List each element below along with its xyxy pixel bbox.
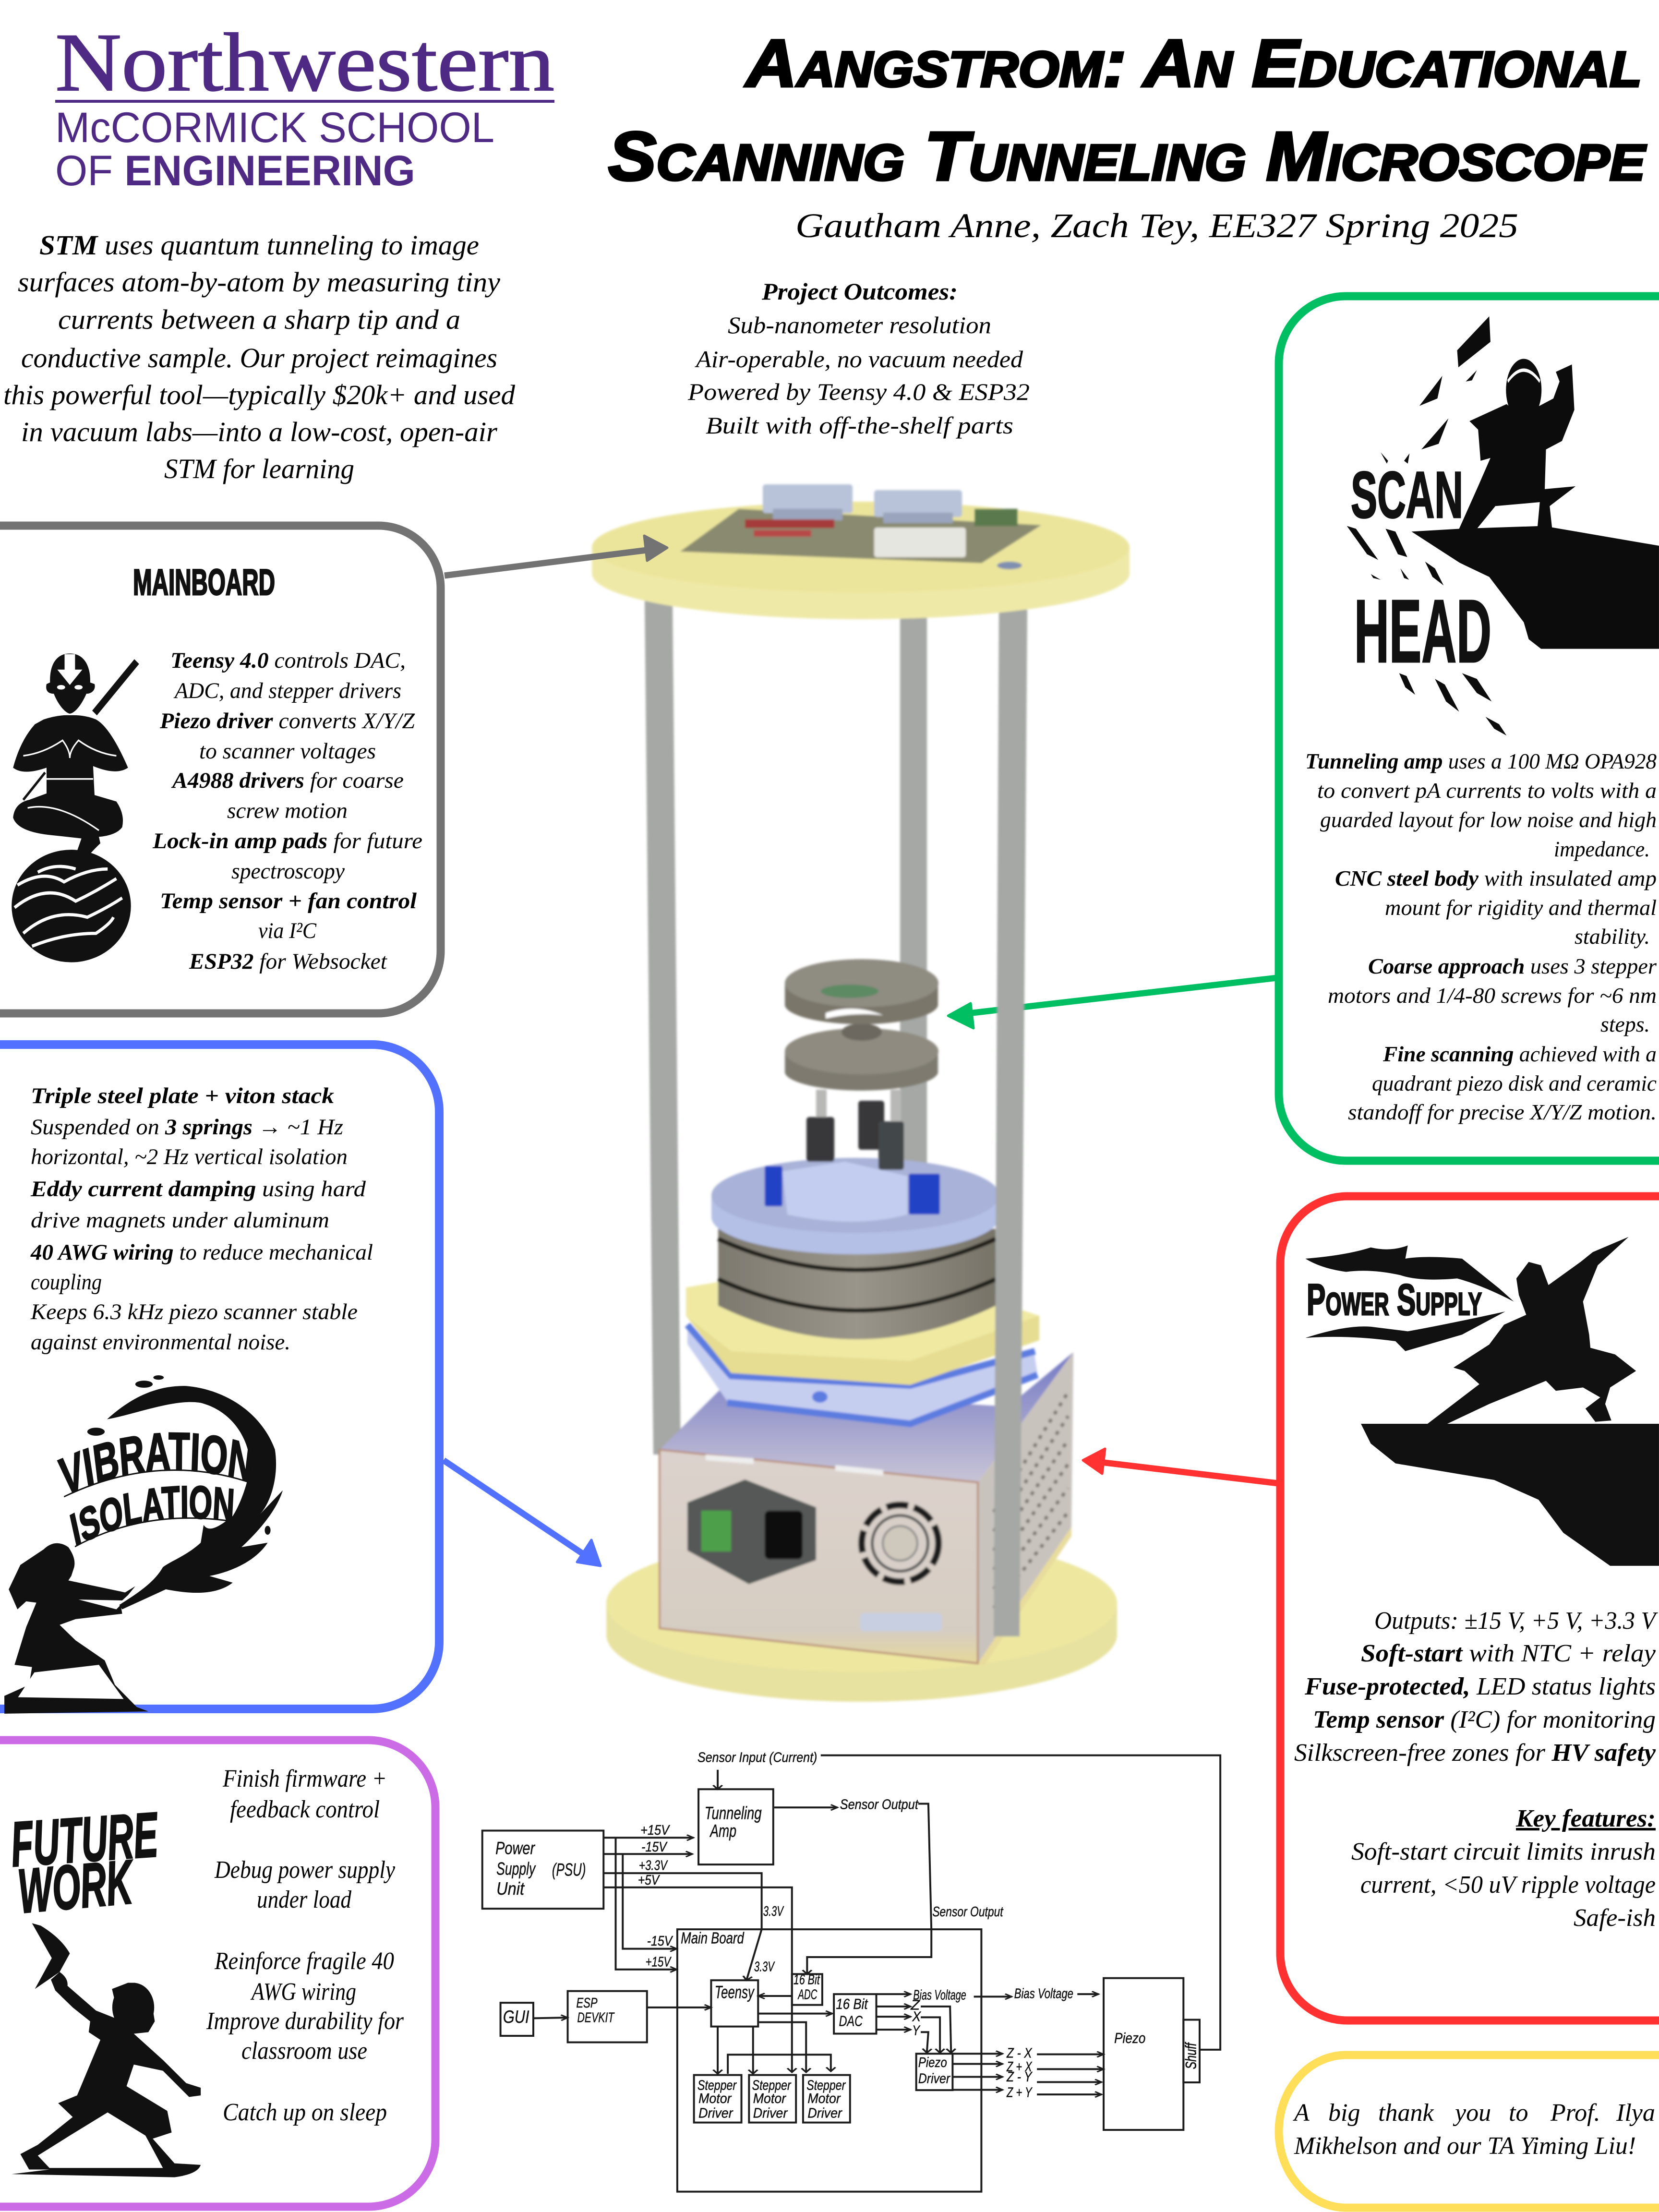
mainboard description: Lock-in amp pads for future (152, 829, 422, 854)
block diagram: Driver (753, 2105, 788, 2121)
future work list: under load (257, 1886, 352, 1913)
mainboard description: via I²C (258, 918, 317, 943)
future work list: classroom use (241, 2037, 367, 2065)
block diagram: Sensor Output (932, 1904, 1003, 1920)
block diagram: +15V (640, 1823, 670, 1838)
thank you text: Mikhelson and our TA Yiming Liu! (1294, 2132, 1636, 2160)
back rod (900, 610, 927, 1171)
vibration isolation description: against environmental noise. (31, 1330, 290, 1355)
block diagram: Z (910, 1997, 920, 2013)
title: AANGSTROM: AN EDUCATIONAL (745, 25, 1642, 101)
screws (806, 1090, 904, 1170)
lilac plate with magnets (711, 1158, 999, 1254)
block diagram: Bias Voltage (913, 1988, 966, 2003)
intro text block: conductive sample. Our project reimagines (21, 342, 497, 373)
block diagram: 16 Bit (793, 1972, 820, 1987)
block diagram: Driver (918, 2071, 951, 2086)
icon lettering: vibration isolation (57, 1432, 251, 1548)
intro text block: this powerful tool—typically $20k+ and used (3, 379, 516, 410)
scan head description: stability. (1575, 924, 1650, 949)
future work list: Improve durability for (206, 2008, 404, 2035)
block diagram: Tunneling (705, 1803, 762, 1823)
block diagram: Motor (807, 2091, 841, 2106)
heading: mainboard: MAINBOARD (133, 562, 275, 603)
icon lettering: vibration isolation: ISOLATION (70, 1485, 234, 1547)
block diagram: DAC (839, 2012, 863, 2029)
future work list: Catch up on sleep (223, 2099, 387, 2126)
scan head description: steps. (1600, 1012, 1650, 1036)
scan head description: quadrant piezo disk and ceramic (1372, 1071, 1657, 1095)
scan head description: guarded layout for low noise and high (1320, 807, 1657, 832)
icon: Toph on cliff with shards (1347, 316, 1659, 735)
logo: Northwestern McCormick School of Engineering (55, 17, 554, 194)
block diagram: Unit (496, 1878, 525, 1899)
power supply description: Temp sensor (I²C) for monitoring (1313, 1706, 1656, 1733)
power supply box (660, 1352, 1073, 1666)
block diagram: (PSU) (552, 1859, 586, 1879)
panel: mainboard (0, 526, 441, 1013)
heading: future work: FUTURE (9, 1799, 161, 1880)
panel: thank you (1279, 2055, 1659, 2208)
project outcomes text: Powered by Teensy 4.0 & ESP32 (687, 378, 1030, 405)
thank you text: Prof. (1550, 2099, 1600, 2127)
power supply description: Key features: (1515, 1805, 1656, 1832)
heading: future work: WORK (15, 1846, 137, 1926)
power supply description: current, <50 uV ripple voltage (1360, 1871, 1656, 1899)
block diagram: ADC (797, 1987, 817, 2002)
mainboard description (152, 648, 422, 974)
panel: scan head (1279, 296, 1659, 1161)
block diagram: Z + X (1006, 2059, 1032, 2075)
block diagram: Sensor Output (840, 1797, 919, 1812)
block diagram: Shuff (1182, 2042, 1200, 2069)
scan head disks (785, 959, 938, 1091)
project outcomes text: Project Outcomes: (761, 278, 958, 305)
block diagram: +3.3V (639, 1858, 668, 1873)
thank you text: A (1293, 2099, 1310, 2127)
mainboard description: Teensy 4.0 controls DAC, (170, 648, 406, 673)
vibration isolation description: Suspended on 3 springs → ~1 Hz (31, 1115, 343, 1140)
power supply description: Safe-ish (1574, 1904, 1656, 1932)
block diagram: +15V (646, 1954, 672, 1970)
future work list (206, 1765, 404, 2126)
block diagram: DEVKIT (577, 2010, 615, 2025)
future work list: Finish firmware + (222, 1765, 387, 1792)
logo: Northwestern McCormick School of Engineering: Northwestern (55, 17, 554, 108)
heading: scan head: SCAN (1351, 458, 1463, 532)
mainboard description: screw motion (227, 798, 348, 823)
power supply description (1294, 1607, 1658, 1932)
heading: scan head: HEAD (1354, 582, 1491, 681)
intro text block: surfaces atom-by-atom by measuring tiny (18, 266, 500, 298)
mainboard description: ADC, and stepper drivers (173, 678, 401, 703)
block diagram: Z - Y (1006, 2069, 1033, 2085)
arrow: power supply (1083, 1449, 1278, 1483)
scan head description: Tunneling amp uses a 100 MΩ OPA928 (1305, 749, 1657, 773)
vibration isolation description: drive magnets under aluminum (31, 1208, 329, 1233)
vibration isolation description: horizontal, ~2 Hz vertical isolation (31, 1144, 348, 1169)
block diagram: Stepper (752, 2078, 792, 2093)
logo: Northwestern McCormick School of Engineering: McCORMICK SCHOOL (55, 103, 494, 151)
intro text block: currents between a sharp tip and a (58, 304, 460, 335)
thank you text: big (1328, 2099, 1360, 2127)
block diagram: Y (912, 2023, 920, 2038)
panel: vibration isolation (0, 1040, 444, 1714)
power supply description: Soft-start with NTC + relay (1361, 1640, 1656, 1667)
logo: Northwestern McCormick School of Engineering: OF ENGINEERING (55, 146, 415, 194)
project outcomes text: Air-operable, no vacuum needed (695, 346, 1023, 373)
scan head description: to convert pA currents to volts with a (1317, 778, 1657, 803)
block diagram: Motor (698, 2091, 732, 2106)
vibration isolation description: Keeps 6.3 kHz piezo scanner stable (30, 1299, 358, 1324)
icon lettering: vibration isolation: VIBRATION (57, 1432, 251, 1494)
icon: waterbender with swirl (4, 1375, 283, 1714)
block diagram: -15V (641, 1839, 668, 1855)
intro text block (3, 229, 516, 484)
mainboard description: Temp sensor + fan control (160, 889, 417, 914)
block diagram: -15V (647, 1934, 673, 1949)
front right rod (994, 610, 1027, 1636)
power supply description: Soft-start circuit limits inrush (1351, 1838, 1656, 1865)
intro text block: STM for learning (164, 453, 354, 484)
scan head description: motors and 1/4-80 screws for ~6 nm (1328, 983, 1657, 1008)
block diagram: Piezo (1114, 2030, 1145, 2046)
heading: power supply: POWER SUPPLY (1307, 1275, 1482, 1324)
heading: scan head (1351, 458, 1491, 681)
thank you text: to (1509, 2099, 1528, 2127)
block diagram: Stepper (806, 2078, 846, 2093)
intro text block: STM uses quantum tunneling to image (39, 229, 479, 261)
authors line: Gautham Anne, Zach Tey, EE327 Spring 2025 (795, 206, 1518, 245)
block diagram: +5V (638, 1873, 660, 1888)
power supply description: Silkscreen-free zones for HV safety (1294, 1739, 1656, 1767)
vibration isolation description: 40 AWG wiring to reduce mechanical (30, 1240, 373, 1265)
arrow: vibration isolation (444, 1460, 601, 1566)
block diagram: Power (495, 1838, 535, 1858)
vibration isolation description (30, 1083, 373, 1355)
block diagram: 3.3V (763, 1904, 784, 1919)
future work list: feedback control (230, 1796, 380, 1823)
left rod (645, 600, 681, 1455)
blue and yellow isolation plates (686, 1282, 1039, 1424)
block diagram: 16 Bit (836, 1996, 868, 2012)
block diagram: Supply (496, 1858, 536, 1878)
block diagram (482, 1750, 1220, 2192)
scan head description: impedance. (1554, 837, 1650, 861)
scan head description: CNC steel body with insulated amp (1335, 866, 1657, 890)
scan head description (1305, 749, 1657, 1124)
block diagram: ESP (576, 1996, 598, 2010)
bottom yellow disk (606, 1535, 1117, 1702)
project outcomes text: Built with off-the-shelf parts (706, 412, 1013, 439)
block diagram: Motor (753, 2091, 787, 2106)
steel stack (718, 1229, 996, 1339)
block diagram: Amp (709, 1820, 736, 1840)
title: SCANNING TUNNELING MICROSCOPE (608, 118, 1647, 195)
STM CAD render (592, 484, 1130, 1702)
future work list: Reinforce fragile 40 (214, 1948, 394, 1975)
block diagram: Piezo (918, 2055, 947, 2070)
vibration isolation description: Eddy current damping using hard (30, 1177, 366, 1202)
vibration isolation description: coupling (31, 1270, 102, 1295)
panel: future work (0, 1740, 435, 2207)
block diagram: X (912, 2009, 921, 2024)
arrow: scan head to green panel (948, 978, 1277, 1028)
thank you text: Ilya (1616, 2099, 1655, 2127)
thank you text: thank (1378, 2099, 1434, 2127)
block diagram: GUI (503, 2007, 529, 2027)
block diagram: 3.3V (754, 1960, 775, 1974)
power supply description: Fuse-protected, LED status lights (1304, 1673, 1656, 1700)
panel: power supply (1280, 1196, 1659, 2020)
block diagram: Sensor Input (Current) (697, 1750, 817, 1765)
block diagram: Z - X (1006, 2046, 1033, 2061)
mainboard PCB (680, 484, 1041, 569)
block diagram: Driver (698, 2105, 733, 2121)
mainboard description: to scanner voltages (199, 739, 376, 764)
icon: Zuko firebending on cliff (1305, 1237, 1659, 1566)
icon: Sokka with boomerang (12, 1923, 201, 2177)
scan head description: Coarse approach uses 3 stepper (1368, 954, 1657, 978)
icon: Aang on earth ball (12, 653, 137, 962)
top yellow disk (592, 502, 1130, 619)
block diagram: Z + Y (1006, 2085, 1033, 2100)
thank you text (1293, 2099, 1655, 2160)
thank you text: you (1453, 2099, 1491, 2127)
block diagram: Teensy (715, 1982, 755, 2002)
arrow: mainboard (445, 536, 667, 576)
project outcomes text: Sub-nanometer resolution (728, 312, 991, 338)
power supply description: Outputs: ±15 V, +5 V, +3.3 V (1374, 1607, 1658, 1635)
mainboard description: Piezo driver converts X/Y/Z (159, 709, 415, 733)
vibration isolation description: Triple steel plate + viton stack (31, 1083, 335, 1108)
mainboard description: ESP32 for Websocket (189, 949, 387, 974)
title (608, 25, 1647, 195)
future work list: Debug power supply (214, 1856, 396, 1884)
scan head description: standoff for precise X/Y/Z motion. (1348, 1100, 1657, 1124)
block diagram: Bias Voltage (1014, 1986, 1073, 2001)
block diagram: Main Board (681, 1929, 745, 1947)
block diagram: Stepper (697, 2078, 737, 2093)
mainboard description: A4988 drivers for coarse (171, 768, 404, 793)
intro text block: in vacuum labs—into a low-cost, open-air (21, 416, 497, 447)
future work list: AWG wiring (250, 1978, 356, 2006)
heading: future work (9, 1799, 161, 1926)
block diagram: Driver (807, 2105, 843, 2121)
project outcomes text (687, 278, 1030, 439)
scan head description: mount for rigidity and thermal (1385, 895, 1657, 920)
scan head description: Fine scanning achieved with a (1382, 1042, 1657, 1066)
mainboard description: spectroscopy (231, 859, 345, 884)
